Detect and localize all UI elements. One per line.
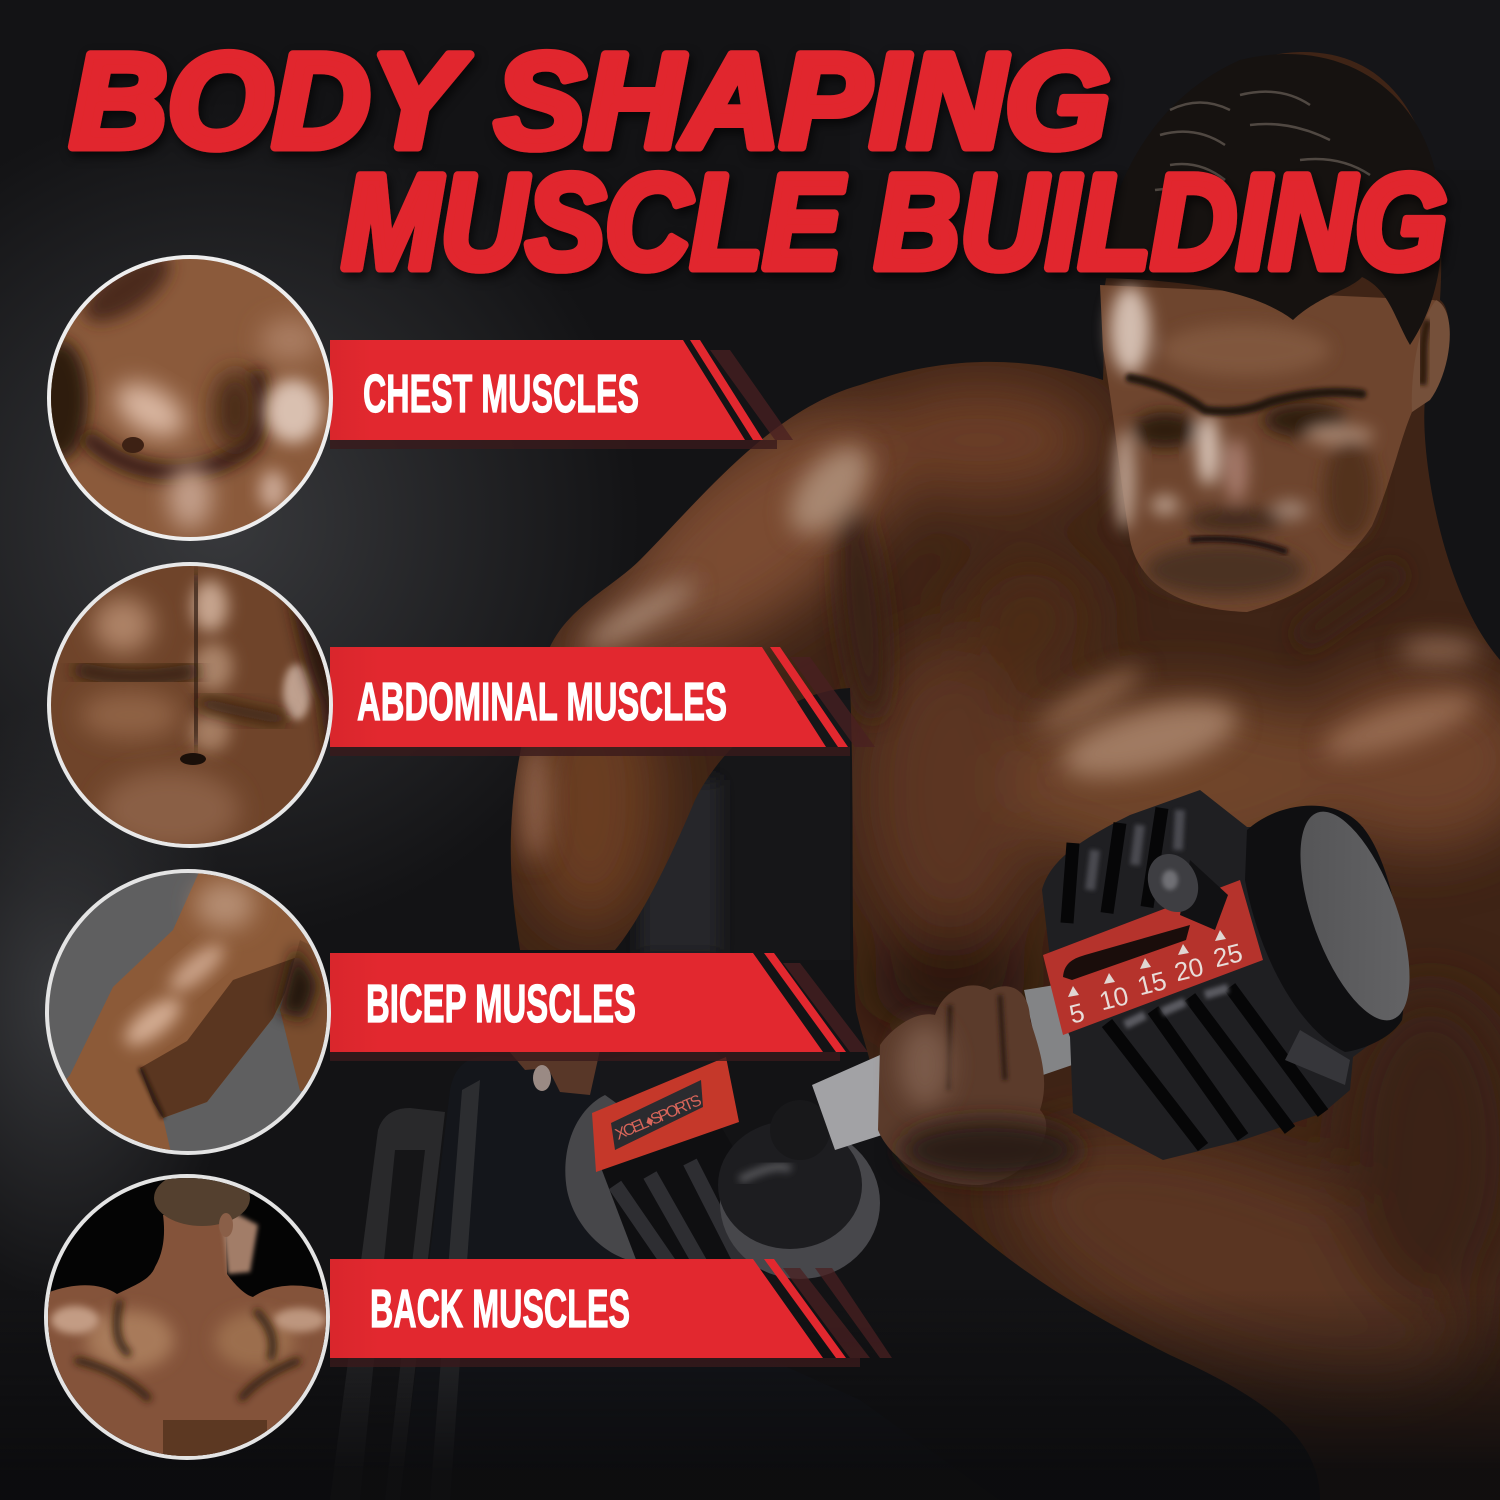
knob <box>1139 846 1228 930</box>
label: BICEP MUSCLES <box>366 974 636 1034</box>
panel: bicep muscles <box>40 869 868 1170</box>
red bracket with brand <box>592 1057 739 1172</box>
photo: back <box>40 1170 340 1470</box>
title <box>70 27 1447 297</box>
panel: abdominal muscles <box>40 560 875 860</box>
knurled grip <box>812 1055 882 1150</box>
red weight selector: 25 <box>1210 937 1245 973</box>
athlete body <box>510 52 1500 1452</box>
banner <box>330 340 793 449</box>
red weight selector: 15 <box>1134 965 1169 1001</box>
banner <box>330 953 868 1061</box>
red bracket with brand: XCEL♦SPORTS <box>613 1092 704 1144</box>
athlete head <box>1100 285 1450 612</box>
bench <box>330 1056 1000 1500</box>
photo: chest <box>47 255 333 541</box>
big dumbbell head <box>1042 790 1432 1160</box>
dumbbell <box>565 790 1432 1285</box>
small dumbbell head <box>565 1040 880 1285</box>
label: BACK MUSCLES <box>370 1279 630 1339</box>
red weight selector <box>1043 880 1263 1035</box>
photo: bicep <box>40 869 340 1170</box>
banner <box>330 647 875 756</box>
label: ABDOMINAL MUSCLES <box>357 672 727 732</box>
handle bar <box>1024 985 1078 1075</box>
hand <box>878 985 1080 1185</box>
panel: back muscles <box>40 1170 892 1470</box>
red weight selector: 20 <box>1171 951 1206 987</box>
banner <box>330 1259 892 1367</box>
label: CHEST MUSCLES <box>363 364 639 424</box>
athlete hair <box>1100 54 1442 345</box>
panel: chest muscles <box>32 241 793 550</box>
red weight selector: 10 <box>1096 980 1131 1016</box>
photo: abs <box>40 560 340 860</box>
title: BODY SHAPING <box>70 27 1110 176</box>
red weight selector: 5 <box>1066 997 1087 1030</box>
left hand on bench <box>508 1050 600 1095</box>
